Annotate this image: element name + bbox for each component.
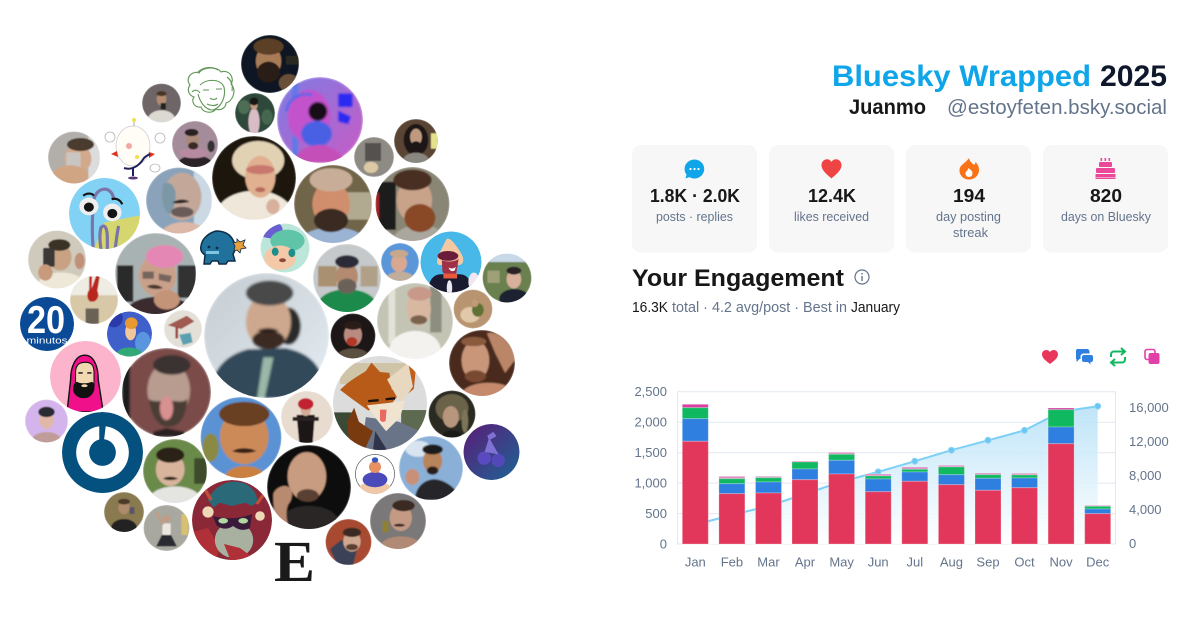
avatar: mirror selfie black sweater (104, 492, 144, 537)
avatar: man with beige cap (294, 165, 372, 243)
avatar: teal hair masked character (192, 480, 272, 564)
panel: likes received: 12.4K (808, 185, 857, 206)
avatar: bearded man in car seat (376, 167, 450, 241)
avatar: cherries (464, 424, 520, 480)
avatar: blue blob cartoon (355, 454, 395, 494)
avatar: shirtless mustache man (370, 493, 426, 559)
avatar: lying on red floor (326, 519, 372, 565)
left axis labels (634, 384, 667, 552)
month labels: Dec (1086, 554, 1110, 570)
panel: day posting streak: 194 (953, 185, 986, 206)
icon: reposts legend (1111, 348, 1125, 366)
avatar: 20 minutos logo: minutos (26, 335, 68, 345)
month labels: Aug (940, 554, 963, 570)
avatar: peace sign selfie (28, 230, 86, 288)
panel: day posting streak: day posting (936, 210, 1001, 224)
avatar: figure on foliage (235, 93, 275, 136)
left axis labels: 0 (660, 536, 667, 552)
avatar: fox character (333, 356, 427, 455)
avatar: man in fur hood (428, 390, 476, 440)
avatar: drag queen (212, 136, 296, 220)
avatar: white t-shirt man (377, 283, 453, 359)
legend icons (1042, 348, 1160, 366)
avatar: dancer in skirt (144, 505, 190, 551)
avatar: red hair in black dress (281, 391, 333, 443)
avatar: reclining figure (454, 290, 492, 328)
avatar: mirror selfie (142, 84, 181, 122)
avatar cloud (20, 35, 531, 594)
panel: likes received: likes received (794, 210, 869, 224)
title: Bluesky Wrapped (832, 60, 1091, 93)
month labels: Jun (868, 554, 889, 570)
engagement summary: January (851, 300, 901, 316)
avatar: 20 minutos logo: 20 (27, 299, 65, 342)
month labels: Feb (721, 554, 743, 570)
month labels: Jan (685, 554, 706, 570)
stacked bars (682, 404, 1111, 544)
left axis labels: 500 (645, 506, 667, 521)
avatar: man with tongue out (122, 348, 211, 437)
avatar: long dark hair man (394, 119, 438, 163)
icon: birthday cake (1096, 158, 1116, 179)
engagement summary: total · 4.2 avg/post · Best in (672, 300, 847, 316)
title: 2025 (1100, 60, 1167, 93)
right axis labels (1129, 400, 1169, 551)
month labels: Jul (906, 554, 923, 570)
avatar: El Pais logo E: E (274, 529, 315, 594)
month labels: Apr (795, 554, 816, 570)
panel: posts and replies: posts · replies (656, 210, 733, 224)
month labels: Mar (757, 554, 780, 570)
avatar: selfie with phone (48, 132, 100, 186)
panel: days on Bluesky: days on Bluesky (1061, 210, 1152, 224)
avatar: man with glasses smoking (143, 439, 207, 503)
right axis labels: 4,000 (1129, 502, 1162, 517)
user name and handle: @estoyfeten.bsky.social (947, 97, 1167, 119)
avatar: red rabbit (70, 275, 118, 324)
right axis labels: 0 (1129, 536, 1136, 551)
cumulative area (695, 406, 1098, 544)
avatar: 20 minutos logo (20, 297, 74, 351)
user name and handle (849, 96, 1167, 119)
user name and handle: Juanmo (849, 96, 926, 119)
engagement summary (632, 300, 901, 316)
avatar: blue ring logo (62, 412, 143, 493)
avatar: pink hair and glasses (115, 233, 196, 314)
avatar: dark portrait (241, 35, 299, 93)
engagement summary: 16.3K (632, 300, 668, 316)
avatar: abstract sketch (164, 310, 202, 348)
icon: likes legend (1042, 350, 1058, 364)
left axis labels: 2,500 (634, 384, 667, 399)
combined engagement chart (634, 384, 1169, 570)
avatar: Sardonyx cartoon (420, 232, 482, 296)
left axis labels: 2,000 (634, 414, 667, 430)
icon: quotes legend (1145, 350, 1160, 364)
avatar: smiling curly man (200, 397, 282, 478)
icon: replies legend (1076, 348, 1093, 364)
month labels: Oct (1014, 554, 1035, 570)
avatar: man with mountain view (482, 254, 532, 302)
panel: day posting streak: streak (953, 226, 989, 240)
avatar: blue pixel creature (201, 231, 246, 264)
avatar: moogle illustration (105, 118, 165, 180)
panel: day posting streak (906, 145, 1031, 252)
panel: days on Bluesky (1043, 145, 1168, 252)
month labels: Sep (976, 554, 1000, 570)
month labels: Nov (1050, 554, 1073, 570)
avatar: ruff collar portrait (172, 121, 218, 172)
cumulative line (695, 403, 1101, 525)
avatar: zombie makeup (330, 314, 376, 358)
avatar: lilac portrait (25, 400, 68, 442)
icon: info (855, 270, 869, 284)
icon: flame (960, 158, 979, 180)
avatar: orange hair cartoon (105, 309, 152, 356)
avatar: large central selfie (204, 273, 329, 398)
avatar: dog on couch (354, 137, 394, 177)
avatar: teal hair cartoon (258, 221, 310, 272)
panel: posts and replies: 1.8K · 2.0K (650, 185, 741, 206)
icon: heart (822, 159, 842, 178)
right axis labels: 8,000 (1129, 468, 1162, 483)
left axis labels: 1,000 (634, 476, 667, 490)
right axis labels: 12,000 (1129, 434, 1169, 449)
avatar: man in sky selfie (381, 243, 419, 281)
avatar: clippy (69, 178, 140, 249)
month labels: May (829, 554, 854, 570)
avatar: man with blue tint (146, 168, 212, 234)
avatar: peace sign hoodie (399, 436, 463, 500)
avatar: shirtless man (449, 330, 515, 396)
panel: days on Bluesky: 820 (1090, 185, 1122, 206)
avatar: green jersey man (313, 244, 381, 312)
right axis labels: 16,000 (1129, 400, 1169, 415)
avatar: man in black leaning (267, 445, 351, 540)
icon: speech bubble (685, 159, 704, 178)
heading: your engagement: Your Engagement (632, 265, 844, 292)
avatar: green line drawing (188, 68, 234, 112)
panel: likes received (769, 145, 894, 252)
avatar: pink hooded pixel figure (50, 341, 121, 412)
panel: posts and replies (632, 145, 757, 252)
month labels (685, 554, 1110, 570)
left axis labels: 1,500 (634, 445, 667, 460)
avatar: purple duotone man (277, 77, 363, 163)
